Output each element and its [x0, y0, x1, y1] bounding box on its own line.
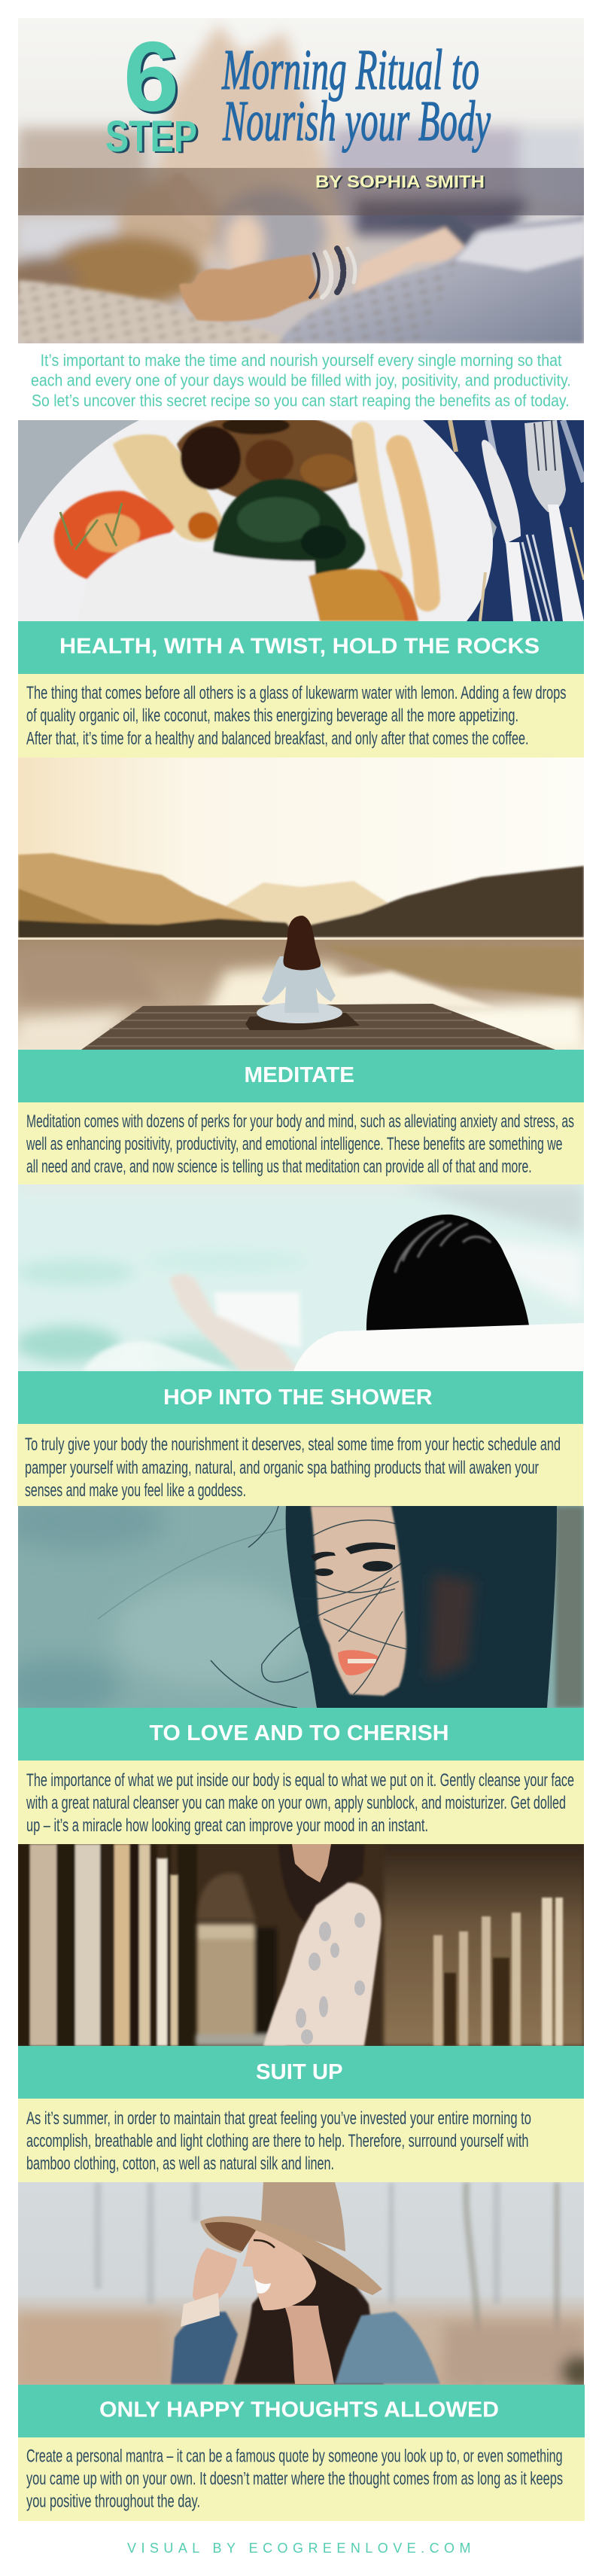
green heading band: [18, 1708, 584, 1761]
photo: woman in bath: [15, 1178, 584, 1373]
text panel: senses and make you feel like a goddess.: [25, 1480, 246, 1501]
panel: step 5 suit up: [18, 1844, 584, 2182]
face: [242, 2229, 316, 2310]
jacket: [171, 2312, 238, 2384]
text panel: [18, 2099, 584, 2182]
byline: BY SOPHIA SMITH: [317, 173, 486, 193]
panel: step 3 shower: [15, 1178, 584, 1506]
photo: meditation on dock: [18, 758, 584, 1050]
text panel: [17, 1424, 583, 1506]
hand: [179, 255, 320, 322]
text panel: bamboo clothing, cotton, as well as natural silk and linen.: [26, 2154, 334, 2174]
heading: HEALTH, WITH A TWIST, HOLD THE ROCKS: [59, 634, 540, 658]
lips: [338, 1650, 379, 1675]
green heading band: [18, 2385, 585, 2437]
hero photo: woman lying in bed: [4, 18, 587, 343]
heading: TO LOVE AND TO CHERISH: [149, 1721, 448, 1745]
green heading band: [18, 621, 584, 674]
hat: [200, 2182, 382, 2295]
byline: BY SOPHIA SMITH: [315, 172, 485, 191]
photo: woman in floral dress under arcade: [18, 1844, 584, 2046]
neck and chest: [284, 2306, 334, 2384]
green heading band: [18, 2046, 584, 2099]
raised hand: [193, 2248, 237, 2304]
dress: [263, 1882, 382, 2046]
dock: [81, 1004, 555, 1050]
title script lines: [221, 38, 491, 153]
title number 6: 6: [126, 23, 181, 134]
hair: [278, 1844, 365, 1922]
text panel: [18, 674, 584, 758]
heading: HOP INTO THE SHOWER: [163, 1386, 433, 1410]
heading: SUIT UP: [256, 2060, 343, 2084]
knife: [482, 440, 521, 544]
panel: step 4 love: [0, 1491, 584, 1844]
title number 6: 6: [123, 21, 179, 132]
meditating woman: [245, 916, 360, 1030]
photo: laughing woman in hat: [18, 2182, 598, 2389]
food: [54, 416, 427, 621]
hair highlights: [395, 1221, 491, 1273]
title word STEP: STEP: [105, 112, 197, 161]
footer credit: VISUAL BY ECOGREENLOVE.COM: [127, 2541, 471, 2556]
intro paragraph: [31, 351, 571, 410]
panel: step 6 happy thoughts: [18, 2182, 598, 2521]
panel: hero header: [4, 18, 587, 343]
photo: breakfast plate: [18, 416, 584, 621]
heading: MEDITATE: [244, 1063, 354, 1087]
text panel: [18, 2437, 585, 2521]
text panel: [18, 1761, 584, 1844]
face and neck: [292, 1844, 331, 1882]
fork: [524, 420, 566, 512]
towel: [293, 1323, 584, 1371]
hair: [234, 2248, 384, 2384]
flyaway strands: [98, 1506, 406, 1708]
hair: [366, 1215, 529, 1334]
dark overlay band: [18, 168, 584, 215]
text panel: [18, 1102, 584, 1184]
text panel: you positive throughout the day.: [26, 2491, 200, 2512]
panel: step 2 meditate: [18, 758, 584, 1184]
green heading band: [18, 1050, 584, 1102]
title word STEP: STEP: [108, 114, 199, 163]
heading: ONLY HAPPY THOUGHTS ALLOWED: [99, 2398, 499, 2422]
brows and eyes: [311, 1542, 395, 1576]
bracelets: [310, 248, 355, 297]
panel: step 1 health: [18, 416, 584, 758]
photo: woman with windblown hair: [18, 1506, 584, 1708]
green heading band: [18, 1371, 583, 1424]
